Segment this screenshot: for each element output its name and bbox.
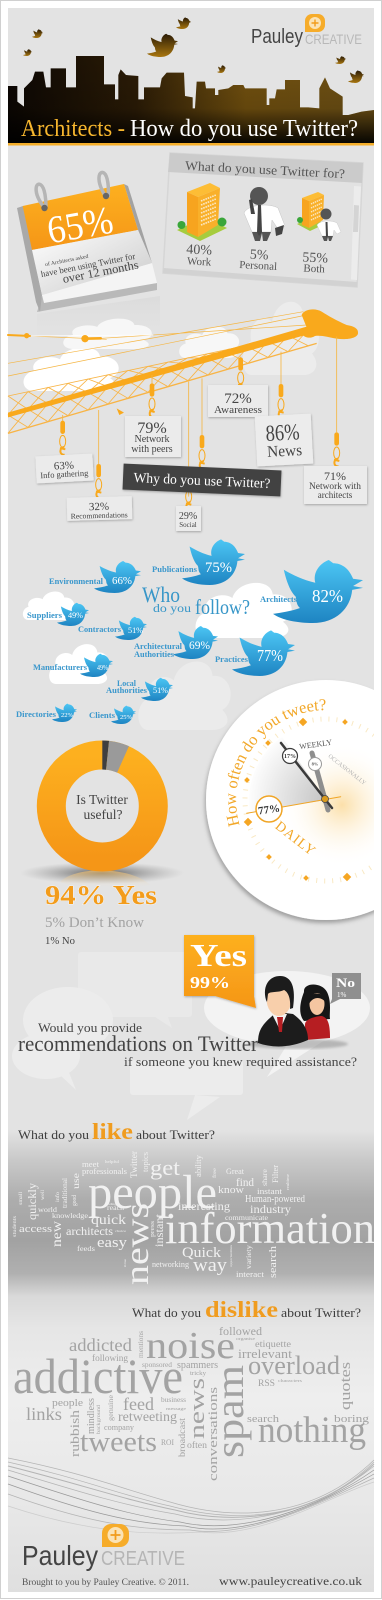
clock hands bbox=[247, 743, 341, 813]
twitter birds chart bbox=[52, 539, 363, 724]
heading: what do you like: What do you bbox=[18, 1127, 90, 1142]
word cloud: likes: professionals bbox=[82, 1167, 127, 1176]
word cloud: likes: reach bbox=[107, 1204, 125, 1212]
figure: 65%: 65% bbox=[44, 199, 116, 252]
word cloud: likes: instant bbox=[257, 1187, 283, 1196]
icon: plus speech bubble bbox=[305, 14, 325, 32]
word cloud: likes: access bbox=[19, 1223, 52, 1235]
word cloud: dislikes: followed bbox=[219, 1324, 262, 1338]
icon: businessman bbox=[244, 187, 285, 241]
word cloud: likes: way bbox=[193, 1255, 228, 1276]
follow labels: Directories bbox=[16, 709, 57, 719]
word cloud: dislikes bbox=[13, 1324, 370, 1481]
crane clouds bbox=[24, 302, 319, 391]
calendar: 65% bbox=[17, 172, 160, 350]
word cloud: dislikes: overload bbox=[248, 1351, 340, 1380]
word cloud: dislikes: retweeting bbox=[118, 1410, 177, 1425]
word cloud: likes: know bbox=[218, 1184, 244, 1196]
word cloud: likes: students bbox=[13, 1216, 18, 1237]
word cloud: likes: traditional bbox=[61, 1178, 69, 1208]
stat: 55% both: Both bbox=[303, 262, 326, 276]
crane ropes bbox=[63, 337, 337, 497]
word cloud: likes: well bbox=[41, 1189, 46, 1200]
dial: 8% occasionally: 8% bbox=[312, 762, 319, 766]
card: 79% network with peers: with peers bbox=[131, 444, 173, 455]
word cloud: dislikes: boring bbox=[334, 1413, 370, 1425]
card: 86% news bbox=[255, 414, 313, 466]
word cloud: likes: use bbox=[71, 1173, 81, 1189]
stat: 55% both bbox=[302, 250, 329, 276]
section: who do you follow bbox=[16, 539, 363, 730]
card: 71% network with architects: 71% bbox=[324, 469, 346, 483]
clock labels bbox=[272, 738, 367, 860]
word cloud: likes: people bbox=[88, 1166, 217, 1219]
word cloud: likes: ability bbox=[194, 1155, 203, 1177]
follow clouds bbox=[23, 583, 292, 730]
follow percentages bbox=[61, 560, 343, 721]
crane head bbox=[302, 309, 358, 339]
follow percentages: 82% bbox=[312, 586, 343, 606]
word cloud: dislikes: ROI bbox=[161, 1438, 174, 1447]
word cloud: dislikes: RSS bbox=[258, 1378, 275, 1388]
crane boom bbox=[8, 327, 312, 417]
word cloud: likes: share bbox=[261, 1169, 269, 1186]
word cloud: likes: interesting bbox=[178, 1199, 230, 1213]
word cloud: likes: quick bbox=[91, 1213, 126, 1228]
follow labels: Publications bbox=[152, 564, 198, 574]
footer credit: Brought to you by Pauley Creative. © 2011. bbox=[22, 1577, 189, 1588]
word cloud: likes: find bbox=[236, 1175, 254, 1189]
follow heading bbox=[142, 582, 250, 619]
word cloud: likes: Filter bbox=[271, 1165, 280, 1183]
calendar caption: have been using Twitter for bbox=[40, 251, 136, 279]
clock: how often do you tweet: How often do you tweet? bbox=[226, 699, 326, 828]
banner underline bbox=[8, 143, 374, 146]
callout: no 1%: 1% bbox=[337, 991, 346, 999]
crane bbox=[8, 309, 358, 510]
word cloud: dislikes: quotes bbox=[338, 1362, 354, 1410]
follow percentages: 66% bbox=[112, 575, 132, 587]
word cloud: dislikes: irrelevant bbox=[238, 1346, 292, 1361]
word cloud: likes: info bbox=[56, 1191, 61, 1202]
word cloud background gradient bbox=[8, 1130, 374, 1592]
word cloud: likes: Twitter bbox=[129, 1151, 139, 1178]
word cloud: likes: free bbox=[213, 1167, 218, 1178]
word cloud: dislikes: sponsored bbox=[142, 1361, 173, 1369]
logo: Pauley Creative header: CREATIVE bbox=[305, 31, 362, 47]
word cloud: likes: interact bbox=[236, 1270, 265, 1279]
follow labels: Architectural bbox=[134, 641, 183, 651]
word cloud: dislikes: mindless bbox=[86, 1398, 97, 1434]
word cloud: dislikes: etiquette bbox=[255, 1339, 291, 1349]
icon: plus speech bubble bbox=[102, 1524, 129, 1547]
follow labels bbox=[16, 564, 298, 720]
follow labels: Architects bbox=[260, 594, 298, 604]
donut ring bbox=[51, 755, 153, 857]
word cloud: dislikes: organise bbox=[236, 1336, 255, 1341]
calendar reflection bbox=[37, 296, 160, 350]
clock labels: DAILY bbox=[272, 819, 318, 860]
follow percentages: 49% bbox=[97, 664, 108, 672]
word cloud: likes: new bbox=[50, 1220, 65, 1247]
word cloud: dislikes: people bbox=[52, 1397, 83, 1409]
word cloud: likes: feeds bbox=[77, 1245, 95, 1253]
card: 71% network with architects bbox=[304, 466, 367, 504]
donut chart: is Twitter useful bbox=[20, 755, 184, 888]
heading: what do you like bbox=[18, 1119, 215, 1144]
callout: yes 99%: 99% bbox=[190, 973, 230, 992]
card: 72% awareness bbox=[208, 385, 268, 417]
word cloud: likes: instant bbox=[152, 1213, 166, 1247]
word cloud: dislikes: genuine bbox=[107, 1395, 115, 1421]
card: 79% network with peers bbox=[125, 416, 181, 457]
word cloud: likes bbox=[13, 1151, 375, 1285]
word cloud: likes: choice bbox=[115, 1229, 127, 1233]
word cloud: likes: Human-powered bbox=[245, 1194, 305, 1205]
follow percentages: 25% bbox=[120, 715, 132, 721]
follow percentages: 51% bbox=[153, 686, 168, 695]
stat: 5% personal: Personal bbox=[239, 259, 277, 273]
follow heading: follow? bbox=[195, 595, 250, 619]
calendar rings bbox=[36, 172, 108, 207]
word cloud: likes: opportunities bbox=[229, 1244, 233, 1267]
calendar page stack bbox=[17, 184, 157, 312]
icon: two people bbox=[248, 976, 348, 1049]
dial: 77% daily bbox=[256, 796, 282, 822]
stat: 40% work: Work bbox=[187, 255, 212, 269]
stat: 1% no: 1% No bbox=[45, 936, 75, 947]
follow labels: Manufacturers bbox=[33, 662, 88, 672]
dial: 77% daily: 77% bbox=[257, 803, 281, 817]
logo: Pauley Creative header bbox=[251, 14, 362, 48]
word cloud: dislikes: tricky bbox=[190, 1371, 206, 1377]
header banner: How do you use Twitter? bbox=[130, 116, 358, 142]
follow labels: Local bbox=[117, 678, 137, 688]
follow percentages: 22% bbox=[61, 713, 73, 719]
calendar caption bbox=[39, 244, 140, 290]
word cloud: likes: realtime bbox=[285, 1174, 290, 1190]
word cloud: dislikes: nothing bbox=[258, 1410, 366, 1451]
word cloud: likes: networking bbox=[152, 1260, 189, 1269]
callout: yes 99%: Yes bbox=[190, 937, 247, 973]
dial: 17% weekly: 17% bbox=[284, 754, 296, 760]
card: 29% social: 29% bbox=[179, 511, 197, 522]
word cloud: dislikes: noise bbox=[146, 1325, 235, 1367]
stat: 40% work: 40% bbox=[186, 242, 213, 259]
word cloud: dislikes: characters bbox=[278, 1378, 303, 1383]
word cloud: likes: quickly bbox=[25, 1183, 39, 1220]
word cloud: likes: knowledge bbox=[52, 1212, 88, 1220]
word cloud: likes: architects bbox=[66, 1224, 113, 1238]
word cloud: likes: topics bbox=[141, 1152, 150, 1172]
word cloud: dislikes: often bbox=[187, 1440, 208, 1450]
card: 86% news: 86% bbox=[265, 419, 300, 446]
background speech bubbles bbox=[12, 952, 370, 1120]
donut center label bbox=[76, 792, 128, 822]
logo: Pauley Creative footer: CREATIVE bbox=[101, 1548, 185, 1570]
word cloud: dislikes: spammers bbox=[177, 1360, 218, 1371]
card: 29% social bbox=[176, 506, 201, 531]
card: 71% network with architects: architects bbox=[318, 490, 353, 500]
follow labels: Suppliers bbox=[27, 610, 63, 620]
word cloud: likes: helpful bbox=[105, 1159, 120, 1164]
word cloud: dislikes: business bbox=[161, 1396, 186, 1404]
card: 79% network with peers: Network bbox=[134, 434, 170, 445]
icon: office building bbox=[177, 183, 227, 241]
card: 32% recommendations: Recommendations bbox=[71, 510, 128, 521]
card: 63% info gathering: Info gathering bbox=[40, 468, 89, 480]
clock heading bbox=[236, 710, 336, 825]
clock face bbox=[206, 680, 382, 920]
word cloud: likes: easy bbox=[97, 1235, 128, 1251]
calendar orange top bbox=[23, 184, 138, 250]
word cloud: dislikes: mentions bbox=[137, 1331, 145, 1358]
stat: 94% yes: 94% Yes bbox=[45, 880, 157, 910]
word cloud: likes: press bbox=[150, 1220, 156, 1237]
word cloud: dislikes: search bbox=[247, 1413, 280, 1425]
word cloud: likes: Great bbox=[226, 1167, 245, 1176]
word cloud: likes: meet bbox=[82, 1160, 100, 1169]
crane hooks bbox=[60, 421, 66, 455]
donut shadow bbox=[20, 862, 184, 884]
word cloud: likes: sending bbox=[105, 1202, 117, 1206]
follow labels: Authorities bbox=[134, 649, 175, 659]
logo: Pauley Creative footer bbox=[22, 1524, 185, 1571]
clock labels: OCCASIONALLY bbox=[327, 754, 367, 787]
calendar white page bbox=[32, 230, 152, 295]
footer website: www.pauleycreative.co.uk bbox=[219, 1574, 362, 1588]
clock ticks bbox=[244, 718, 382, 881]
dial: 17% weekly bbox=[282, 748, 298, 764]
word cloud: likes: variety bbox=[244, 1245, 253, 1269]
word cloud: likes: Quick bbox=[182, 1245, 222, 1261]
card: 63% info gathering: 63% bbox=[54, 459, 74, 473]
heading: what do you dislike: What do you bbox=[132, 1305, 202, 1320]
dial: 8% occasionally bbox=[308, 758, 322, 770]
heading: what do you dislike bbox=[132, 1297, 361, 1322]
word cloud: likes: get bbox=[150, 1155, 180, 1180]
donut center label: Is Twitter bbox=[76, 792, 128, 807]
flock of birds bbox=[23, 17, 364, 83]
word cloud: dislikes: rubbish bbox=[67, 1409, 82, 1457]
crane lattice bbox=[8, 330, 317, 433]
stat: 5% personal: 5% bbox=[249, 248, 269, 264]
word cloud: likes: good bbox=[72, 1195, 78, 1206]
card: 32% recommendations bbox=[67, 496, 132, 521]
word cloud: dislikes: background bbox=[97, 1404, 102, 1434]
clock labels: WEEKLY bbox=[299, 738, 333, 751]
word cloud: dislikes: conversations bbox=[205, 1387, 220, 1481]
follow labels: Environmental bbox=[49, 576, 104, 586]
recommendations question: Would you provide bbox=[38, 1021, 142, 1035]
follow labels: Authorities bbox=[106, 685, 148, 695]
card: 72% awareness: Awareness bbox=[214, 405, 262, 416]
wave graphic bbox=[8, 1458, 374, 1533]
header banner bbox=[8, 56, 374, 146]
follow percentages: 69% bbox=[189, 638, 210, 652]
calendar caption: over 12 months bbox=[61, 257, 140, 286]
panel heading: What do you use Twitter for? bbox=[185, 158, 346, 181]
calendar caption: of Architects asked bbox=[44, 253, 89, 268]
word cloud: dislikes: feed bbox=[123, 1394, 154, 1414]
recommendations question: recommendations on Twitter bbox=[18, 1031, 259, 1056]
follow labels: Clients bbox=[89, 710, 116, 720]
stat: 55% both: 55% bbox=[302, 250, 329, 267]
word cloud: likes: information bbox=[165, 1204, 375, 1253]
word cloud: likes: small bbox=[19, 1191, 24, 1205]
card: 63% info gathering bbox=[35, 454, 94, 483]
follow heading: do you bbox=[153, 601, 191, 615]
follow percentages: 75% bbox=[205, 560, 232, 576]
section: recommendations bbox=[12, 935, 370, 1120]
stat: 5% don't know: 5% Don’t Know bbox=[45, 915, 144, 931]
word cloud: dislikes: addictive bbox=[13, 1348, 183, 1404]
donut center label: useful? bbox=[84, 807, 122, 822]
title: Architects - bbox=[21, 116, 125, 142]
word cloud: dislikes: spam bbox=[207, 1365, 252, 1458]
heading: what do you like: about Twitter? bbox=[136, 1127, 215, 1142]
follow labels: Contractors bbox=[78, 624, 122, 634]
clock center bbox=[322, 796, 328, 802]
recommendations question bbox=[18, 1021, 357, 1069]
callout: yes 99% bbox=[184, 935, 256, 1008]
clock: how often do you tweet bbox=[202, 680, 374, 926]
word cloud: dislikes: broadcast bbox=[177, 1417, 187, 1457]
follow percentages: 51% bbox=[128, 626, 143, 635]
card: 86% news: News bbox=[267, 442, 303, 461]
skyline silhouette bbox=[8, 56, 374, 143]
word cloud: likes: industry bbox=[250, 1202, 291, 1216]
follow labels: Practices bbox=[215, 654, 249, 664]
heading: what do you dislike: about Twitter? bbox=[281, 1305, 361, 1320]
icon: building and businessman bbox=[297, 192, 341, 241]
panel window bbox=[163, 153, 363, 287]
card: why do you use Twitter: Why do you use Twitter? bbox=[133, 471, 271, 492]
follow heading: Who bbox=[142, 582, 180, 607]
word cloud: likes: world bbox=[38, 1206, 58, 1214]
card: 71% network with architects: Network with bbox=[309, 481, 362, 491]
word cloud: dislikes: company bbox=[104, 1423, 134, 1432]
card: 32% recommendations: 32% bbox=[89, 501, 109, 513]
stat: 40% work bbox=[186, 242, 213, 269]
word cloud: dislikes: addicted bbox=[69, 1335, 132, 1355]
heading: what do you like: like bbox=[92, 1119, 133, 1144]
follow percentages: 77% bbox=[257, 646, 283, 665]
heading: what do you dislike: dislike bbox=[205, 1297, 278, 1322]
clock shading bbox=[257, 744, 374, 848]
callout: no 1% bbox=[330, 973, 361, 1004]
callout: no 1%: No bbox=[336, 975, 355, 990]
word cloud: dislikes: message bbox=[166, 1406, 186, 1411]
word cloud: dislikes: news bbox=[184, 1378, 209, 1439]
card: 79% network with peers: 79% bbox=[137, 420, 167, 437]
recommendations question: if someone you knew required assistance? bbox=[124, 1055, 357, 1069]
card: why do you use Twitter bbox=[123, 464, 281, 496]
logo: Pauley Creative header: Pauley bbox=[251, 26, 303, 48]
card: 29% social: Social bbox=[179, 521, 197, 529]
word cloud: likes: search bbox=[267, 1245, 279, 1278]
crane cables bbox=[8, 312, 307, 376]
card: 72% awareness: 72% bbox=[224, 391, 252, 407]
logo: Pauley Creative footer: Pauley bbox=[22, 1540, 98, 1571]
stat: 5% personal bbox=[239, 248, 277, 273]
word cloud: dislikes: links bbox=[26, 1404, 62, 1424]
word cloud: likes: communicate bbox=[225, 1213, 269, 1222]
word cloud: dislikes: tweets bbox=[80, 1427, 157, 1458]
follow percentages: 49% bbox=[68, 611, 83, 620]
word cloud: likes: time bbox=[123, 1258, 127, 1267]
word cloud: dislikes: following bbox=[92, 1353, 129, 1363]
word cloud: likes: news bbox=[119, 1203, 156, 1285]
panel: what do you use Twitter for bbox=[163, 153, 363, 287]
